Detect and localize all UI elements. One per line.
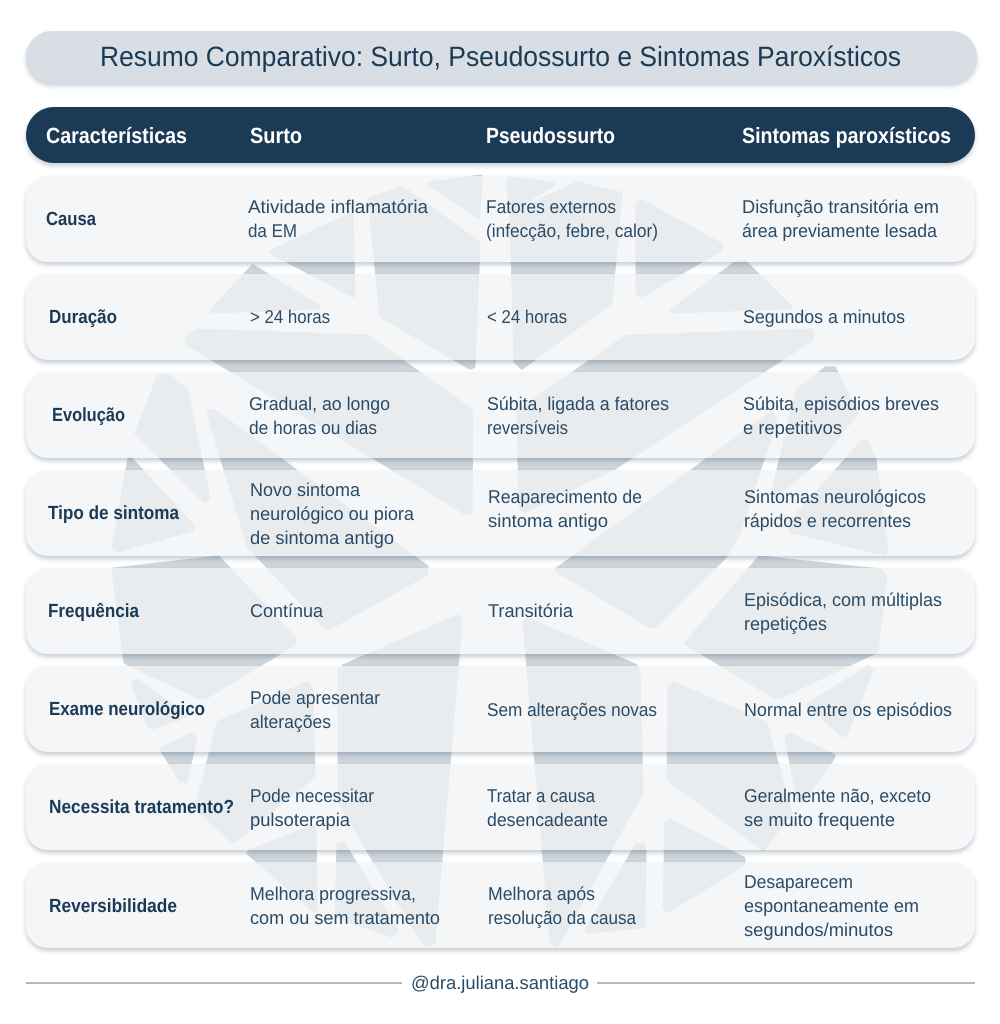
column heading: Características: Características [46,123,187,148]
cell: sintomas paroxísticos [742,196,939,241]
column heading: Sintomas paroxísticos: Sintomas paroxísticos [742,123,951,148]
cell: sintomas paroxísticos: Disfunção transitória em [742,196,939,217]
cell: sintomas paroxísticos: Episódica, com múltiplas [744,589,942,610]
cell: pseudossurto: (infecção, febre, calor) [486,220,658,241]
cell: sintomas paroxísticos [744,486,926,531]
cell: surto: Contínua [250,600,324,621]
cell: sintomas paroxísticos: Geralmente não, exceto [744,785,931,806]
label: Duração: Duração [49,307,117,328]
title: Resumo Comparativo: Surto, Pseudossurto e Sintomas Paroxísticos [100,41,901,72]
cell: surto [248,196,429,241]
cell: pseudossurto: reversíveis [487,417,568,438]
cell: sintomas paroxísticos: e repetitivos [743,417,842,438]
cell: pseudossurto: Reaparecimento de [488,486,642,507]
row: Evolução [26,372,975,458]
cell: sintomas paroxísticos: Segundos a minutos [743,306,905,327]
label: Necessita tratamento?: Necessita tratamento? [49,797,234,818]
cell: sintomas paroxísticos: Desaparecem [744,871,853,892]
cell: surto: Pode necessitar [250,785,374,806]
cell: pseudossurto [488,883,637,928]
cell: pseudossurto: Súbita, ligada a fatores [487,393,669,414]
handle text: @dra.juliana.santiago [411,972,589,993]
cell: surto: da EM [248,220,297,241]
cell: sintomas paroxísticos: espontaneamente em [744,895,919,916]
label: Frequência: Frequência [48,601,139,622]
cell: sintomas paroxísticos [744,589,942,634]
row: Frequência [26,568,975,654]
cell: pseudossurto: desencadeante [487,809,608,830]
cell: sintomas paroxísticos: repetições [744,613,827,634]
cell: sintomas paroxísticos [744,871,919,940]
cell: pseudossurto: Transitória [488,600,574,621]
label: Reversibilidade: Reversibilidade [49,896,177,917]
cell: sintomas paroxísticos: se muito frequente [744,809,895,830]
cell: surto: > 24 horas [250,306,330,327]
label: Exame neurológico: Exame neurológico [49,699,205,720]
cell: surto [250,883,440,928]
cell: surto: de horas ou dias [249,417,377,438]
row: Duração [26,274,975,360]
row: Exame neurológico [26,666,975,752]
column heading: Pseudossurto: Pseudossurto [486,123,615,148]
cell: pseudossurto: sintoma antigo [488,510,608,531]
cell: surto: de sintoma antigo [250,527,394,548]
row: Necessita tratamento [26,764,975,850]
cell: pseudossurto [488,486,642,531]
cell: surto: neurológico ou piora [250,503,415,524]
cell: surto [249,393,390,438]
cell: pseudossurto: Melhora após [488,883,595,904]
cell: surto: com ou sem tratamento [250,907,440,928]
row: Tipo de sintoma [26,470,975,556]
cell: surto [250,785,374,830]
cell: pseudossurto: resolução da causa [488,907,637,928]
cell: surto: Atividade inflamatória [248,196,429,217]
column heading: Surto: Surto [250,123,302,148]
cell: surto: Novo sintoma [250,479,361,500]
cell: sintomas paroxísticos: Súbita, episódios breves [743,393,939,414]
cell: surto: pulsoterapia [250,809,351,830]
cell: sintomas paroxísticos [743,393,939,438]
cell: sintomas paroxísticos: segundos/minutos [744,919,893,940]
cell: sintomas paroxísticos: área previamente lesada [742,220,938,241]
cell: surto [250,687,380,732]
title bar [26,31,977,83]
table header [26,107,975,163]
cell: surto [250,479,415,548]
cell: surto: Pode apresentar [250,687,380,708]
cell: pseudossurto: Tratar a causa [487,785,596,806]
cell: pseudossurto [486,196,658,241]
row: Causa [26,176,975,262]
cell: pseudossurto [487,785,608,830]
cell: pseudossurto: Sem alterações novas [487,699,657,720]
cell: pseudossurto [487,393,669,438]
cell: sintomas paroxísticos: Normal entre os episódios [744,699,952,720]
label: Tipo de sintoma: Tipo de sintoma [48,503,179,524]
cell: sintomas paroxísticos [744,785,931,830]
cell: surto: alterações [250,711,331,732]
cell: pseudossurto: Fatores externos [486,196,616,217]
cell: pseudossurto: < 24 horas [487,306,567,327]
cell: surto: Gradual, ao longo [249,393,390,414]
cell: sintomas paroxísticos: Sintomas neurológicos [744,486,926,507]
label: Evolução: Evolução [52,405,125,426]
cell: surto: Melhora progressiva, [250,883,416,904]
cell: sintomas paroxísticos: rápidos e recorrentes [744,510,911,531]
label: Causa: Causa [46,209,96,230]
row: Reversibilidade [26,862,975,948]
